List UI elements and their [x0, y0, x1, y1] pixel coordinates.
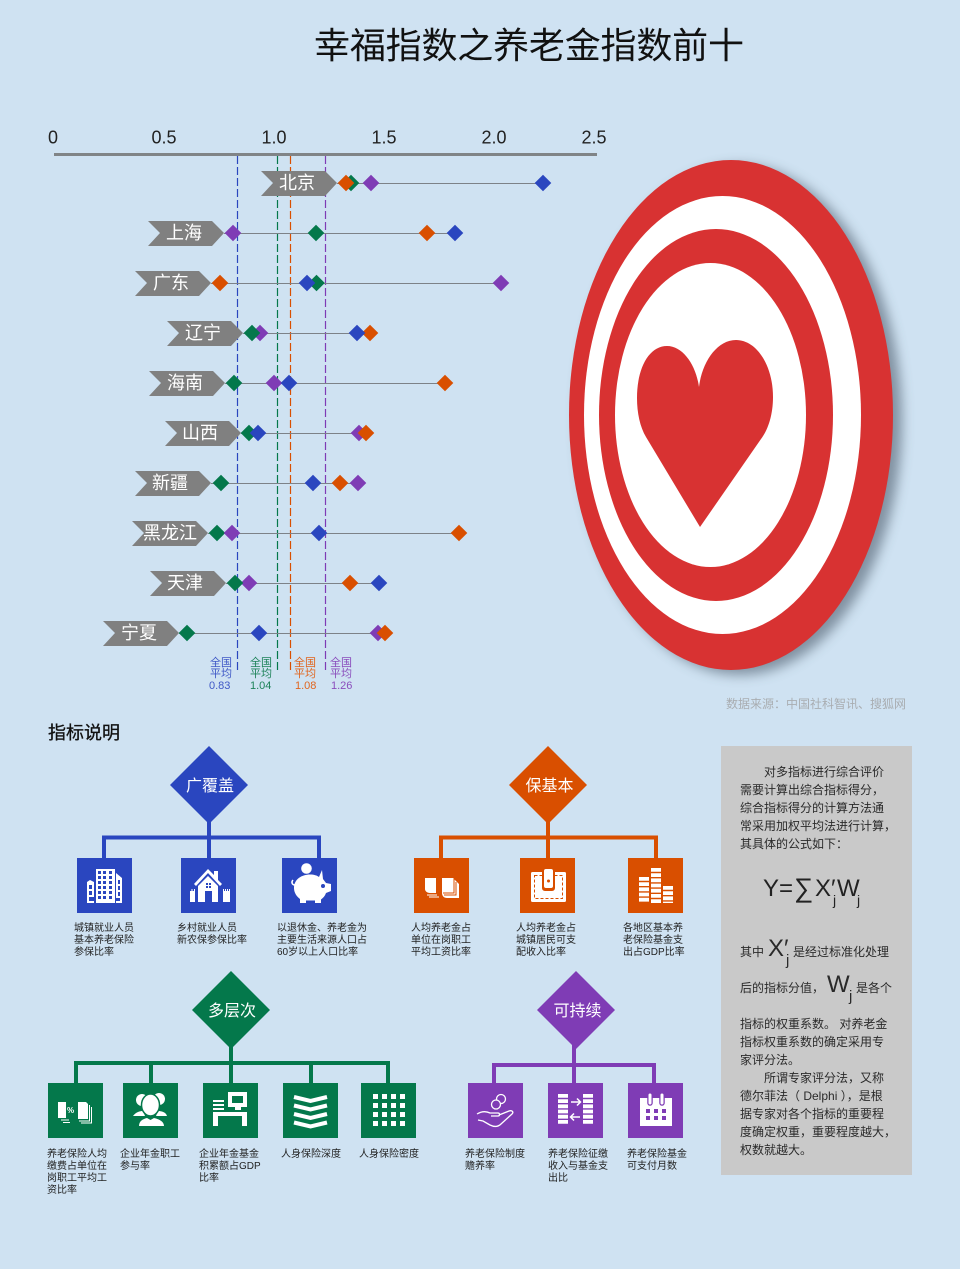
icon: coin stacks	[628, 858, 683, 913]
caption	[199, 1147, 261, 1184]
caption: 养老保险人均	[47, 1147, 107, 1160]
caption	[177, 921, 247, 946]
caption: 出占GDP比率	[623, 945, 685, 958]
row: 辽宁	[167, 321, 378, 346]
paragraph: intro: 需要计算出综合指标得分，	[740, 782, 884, 797]
row: 新疆: 新疆	[152, 473, 188, 493]
paragraph: weights: 度确定权重，重要程度越大，	[740, 1124, 896, 1139]
row: 山西: 山西	[182, 423, 218, 443]
row: 新疆	[135, 471, 366, 496]
national average labels: 平均	[294, 667, 316, 680]
caption	[548, 1147, 608, 1184]
group: 保基本	[411, 746, 685, 958]
connector	[441, 820, 656, 858]
group: 多层次	[47, 971, 419, 1196]
caption: 城镇居民可支	[516, 933, 576, 946]
chart axis	[48, 128, 607, 156]
caption: 人身保险密度	[359, 1147, 419, 1160]
chart axis: 2.0	[481, 128, 507, 148]
chart axis: 0	[48, 128, 58, 148]
national average labels: 1.04	[250, 680, 271, 692]
group: 可持续	[465, 971, 687, 1184]
row: 广东: 广东	[153, 273, 189, 293]
diamond: 保基本	[509, 746, 587, 824]
caption: 单位在岗职工	[411, 933, 471, 946]
caption: 城镇就业人员	[74, 921, 134, 934]
diamond: 保基本: 保基本	[525, 777, 574, 795]
icon: transfer stacks	[548, 1083, 603, 1138]
caption	[623, 921, 685, 958]
caption: 老保险基金支	[623, 933, 683, 946]
formula: j	[832, 892, 836, 908]
formula: j	[856, 892, 860, 908]
caption: 60岁以上人口比率	[277, 945, 358, 958]
row: 上海: 上海	[166, 223, 202, 243]
national average labels: 全国	[250, 655, 272, 669]
caption: 比率	[199, 1171, 219, 1184]
paragraph: variables: 是经过标准化处理	[793, 945, 889, 959]
icon: percent documents: %	[67, 1106, 74, 1115]
row: 黑龙江: 黑龙江	[143, 523, 197, 543]
caption	[627, 1147, 687, 1172]
paragraph: weights: 家评分法。	[740, 1052, 800, 1067]
caption: 企业年金职工	[120, 1147, 180, 1160]
row: 天津: 天津	[167, 573, 203, 593]
connector	[104, 820, 319, 858]
diamond: 多层次: 多层次	[208, 1002, 256, 1020]
caption: 基本养老保险	[74, 933, 134, 946]
caption: 养老保险征缴	[548, 1147, 608, 1160]
row: 上海	[148, 221, 463, 246]
icon: percent documents	[48, 1083, 103, 1138]
caption: 养老保险基金	[627, 1147, 687, 1160]
formula: ∑	[794, 873, 813, 903]
caption: 赡养率	[465, 1159, 495, 1172]
diamond: 可持续	[537, 971, 615, 1049]
paragraph: intro: 对多指标进行综合评价	[764, 764, 884, 779]
caption	[120, 1147, 180, 1172]
row: 宁夏	[103, 621, 393, 646]
target with heart	[569, 160, 902, 675]
caption	[47, 1147, 107, 1196]
caption: 新农保参保比率	[177, 933, 247, 946]
national average labels: 平均	[210, 667, 232, 680]
icon: wallet	[520, 858, 575, 913]
icon: calendar	[628, 1083, 683, 1138]
caption	[74, 921, 134, 958]
caption: 以退休金、养老金为	[277, 921, 367, 934]
diamond: 广覆盖: 广覆盖	[186, 777, 234, 795]
paragraph: weights: 指标权重系数的确定采用专	[740, 1034, 884, 1049]
caption: 养老保险制度	[465, 1147, 525, 1160]
formula	[763, 873, 860, 908]
row: 黑龙江	[132, 521, 467, 546]
caption: 人身保险深度	[281, 1147, 341, 1160]
icon: documents	[414, 858, 469, 913]
national average labels: 全国	[210, 655, 232, 669]
icon: dot grid	[361, 1083, 416, 1138]
caption: 各地区基本养	[623, 921, 683, 934]
paragraph: variables: 其中	[740, 944, 764, 959]
caption: 缴费占单位在	[47, 1159, 107, 1172]
icon: desk	[203, 1083, 258, 1138]
national average labels: 1.08	[295, 680, 316, 692]
paragraph: intro: 其具体的公式如下：	[740, 836, 848, 851]
caption: 出比	[548, 1171, 568, 1184]
national average labels: 0.83	[209, 680, 230, 692]
national average labels: 平均	[330, 667, 352, 680]
paragraph: weights: 权数就越大。	[740, 1142, 812, 1157]
caption: 参保比率	[74, 945, 114, 958]
caption	[277, 921, 367, 958]
paragraph: variables	[740, 935, 892, 1005]
row: 天津	[150, 571, 387, 596]
paragraph: weights: 德尔菲法（ Delphi ），是根	[740, 1088, 883, 1103]
source note: 数据来源：中国社科智讯、搜狐网	[726, 696, 906, 711]
paragraph: weights	[740, 1016, 896, 1157]
paragraph: weights: 所谓专家评分法，又称	[764, 1070, 884, 1085]
paragraph: variables: 是各个	[856, 980, 892, 995]
caption	[465, 1147, 525, 1172]
formula: Y=	[763, 875, 793, 902]
icon: piggy bank	[282, 858, 337, 913]
chart axis: 2.5	[581, 128, 607, 148]
caption: 岗职工平均工	[47, 1172, 107, 1184]
caption: 人均养老金占	[411, 921, 471, 934]
chart axis: 1.0	[261, 128, 287, 148]
connector	[76, 1045, 388, 1083]
row: 广东	[135, 271, 509, 296]
row: 北京	[261, 171, 551, 196]
connector	[494, 1045, 654, 1083]
diamond: 可持续: 可持续	[553, 1002, 602, 1020]
national average labels: 平均	[250, 667, 272, 680]
chart axis: 1.5	[371, 128, 397, 148]
caption: 配收入比率	[516, 945, 566, 958]
section heading: 指标说明	[48, 723, 120, 743]
paragraph: variables: j	[848, 988, 852, 1005]
caption: 参与率	[120, 1159, 150, 1172]
caption: 可支付月数	[627, 1159, 677, 1172]
national average labels: 全国	[330, 655, 352, 669]
caption: 乡村就业人员	[177, 921, 237, 934]
caption: 主要生活来源人口占	[277, 933, 367, 946]
paragraph: variables: j	[785, 952, 789, 969]
national average labels	[209, 655, 352, 692]
icon: building	[77, 858, 132, 913]
panel: method explanation	[721, 746, 912, 1175]
icon: chevrons	[283, 1083, 338, 1138]
row: 海南	[149, 371, 453, 396]
row: 宁夏: 宁夏	[121, 623, 157, 643]
caption: 资比率	[47, 1183, 77, 1196]
caption	[516, 921, 576, 958]
national average labels: 1.26	[331, 680, 352, 692]
formula: X′	[815, 875, 836, 902]
icon: people	[123, 1083, 178, 1138]
row: 辽宁: 辽宁	[185, 323, 221, 343]
formula: W	[837, 875, 860, 902]
icon: house	[181, 858, 236, 913]
caption: 企业年金基金	[199, 1147, 259, 1160]
paragraph: variables: X′	[768, 935, 789, 962]
national average labels: 全国	[294, 655, 316, 669]
paragraph: intro: 常采用加权平均法进行计算，	[740, 818, 896, 833]
row: 山西	[165, 421, 374, 446]
paragraph: variables: 后的指标分值，	[740, 980, 824, 995]
paragraph: weights: 据专家对各个指标的重要程	[740, 1106, 884, 1121]
title: 幸福指数之养老金指数前十	[314, 25, 744, 66]
icon: hand with coins	[468, 1083, 523, 1138]
caption: 积累额占GDP	[199, 1159, 261, 1172]
caption: 收入与基金支	[548, 1159, 608, 1172]
paragraph: weights: 指标的权重系数。 对养老金	[740, 1016, 887, 1031]
caption: 人均养老金占	[516, 921, 576, 934]
group: 广覆盖	[74, 746, 367, 958]
caption	[411, 921, 471, 958]
paragraph: variables: W	[827, 971, 850, 998]
paragraph: intro: 综合指标得分的计算方法通	[740, 800, 884, 815]
diamond: 多层次	[192, 971, 270, 1049]
national average dashed lines	[238, 156, 326, 673]
caption: 平均工资比率	[411, 945, 471, 958]
row: 北京: 北京	[279, 173, 315, 193]
row: 海南: 海南	[167, 373, 203, 393]
paragraph: intro	[740, 764, 896, 851]
diamond: 广覆盖	[170, 746, 248, 824]
chart axis: 0.5	[151, 128, 177, 148]
